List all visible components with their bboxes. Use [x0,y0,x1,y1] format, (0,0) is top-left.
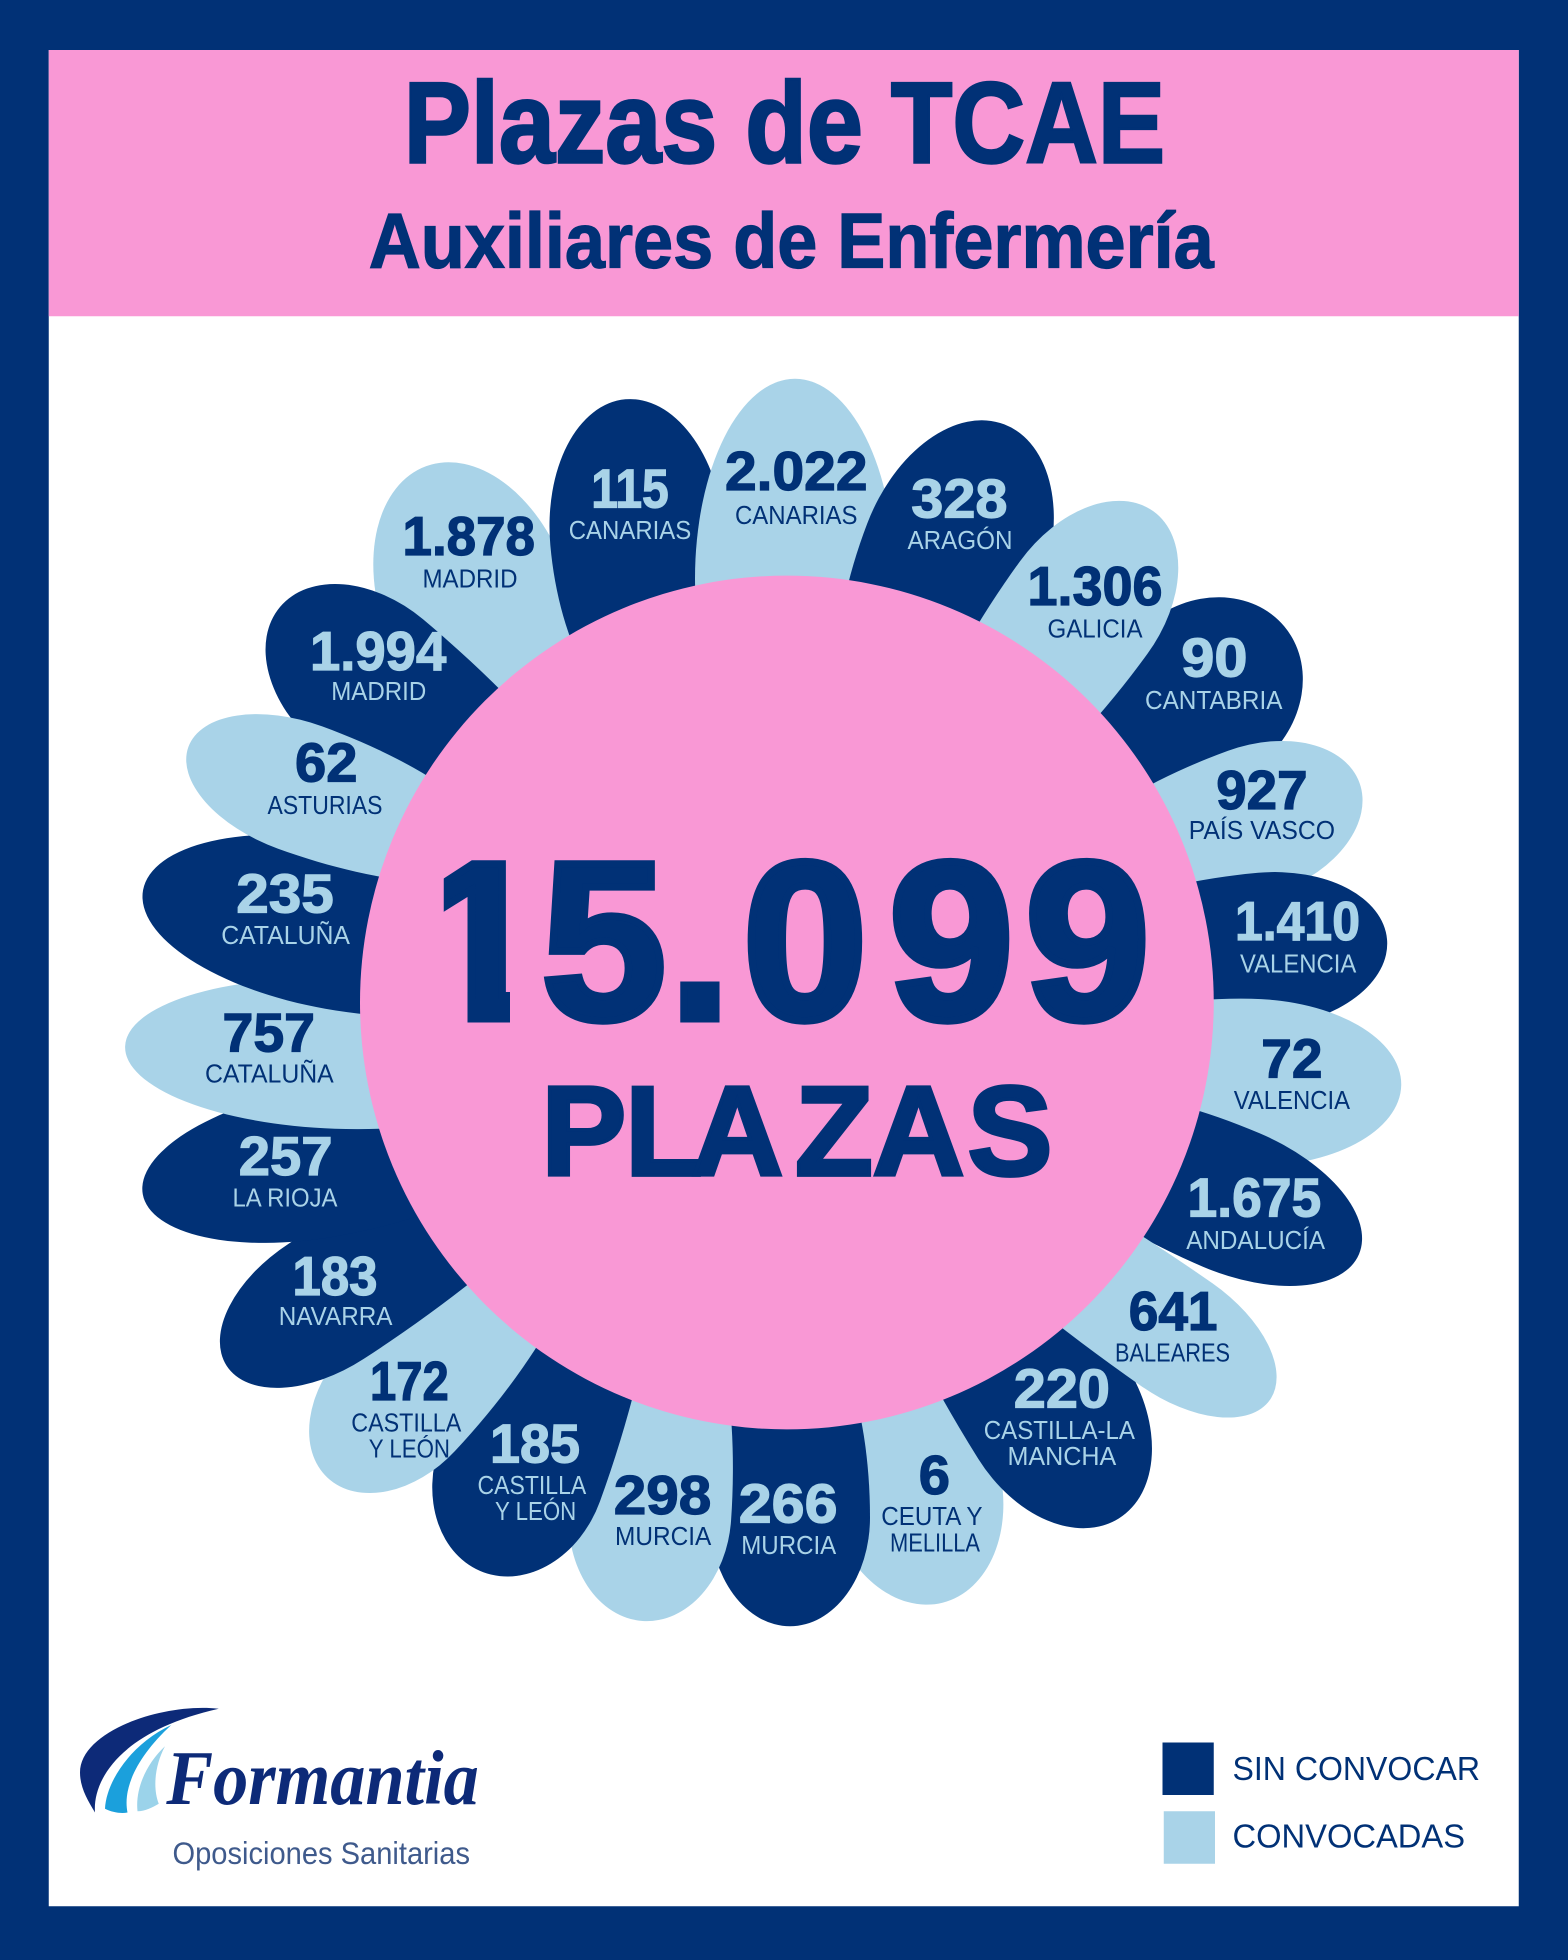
petal: 1.878 Madrid [337,434,641,844]
label: 183 Navarra [279,1245,393,1331]
label: 1.410 Valencia [1235,890,1360,978]
label: 641 Baleares: BALEARES [1115,1337,1230,1367]
legend text: sin convocar: SIN CONVOCAR [1232,1750,1480,1788]
label: 1.306 Galicia [1028,555,1162,644]
petal labels [205,440,1360,1560]
total number: 15.099 [419,815,1150,1067]
label: 641 Baleares [1115,1280,1230,1367]
petal: 1.410 Valencia [1034,862,1394,1047]
label: 1.675 Andalucia: ANDALUCÍA [1186,1225,1325,1255]
label: 298 Murcia: MURCIA [615,1521,712,1551]
petal: 72 Valencia [1024,995,1403,1169]
label: 328 Aragon: ARAGÓN [907,525,1012,555]
label: 220 Castilla-La Mancha: 220 [1014,1357,1110,1419]
label: 1.878 Madrid: MADRID [422,564,517,594]
label: 257 La Rioja [232,1125,338,1212]
flower petals [123,379,1403,1627]
label: 72 Valencia [1234,1028,1350,1115]
label: 641 Baleares: 641 [1129,1280,1217,1342]
label: 328 Aragon: 328 [911,468,1007,530]
label: 298 Murcia [614,1464,712,1551]
label: 1.878 Madrid [402,505,535,594]
label: 757 Cataluna [205,1001,334,1088]
icon: logo swooshes [80,1708,219,1813]
title: Plazas de TCAE [404,60,1165,188]
petal: 257 La Rioja [130,1050,557,1268]
label: 298 Murcia: 298 [614,1464,711,1526]
legend swatch: convocadas [1164,1811,1215,1864]
label: 185 Castilla y Leon: CASTILLA [477,1470,587,1500]
label: 6 Ceuta y Melilla [881,1444,982,1557]
center circle [360,576,1214,1429]
label: 927 Pais Vasco [1189,759,1335,845]
label: 172 Castilla y Leon [351,1350,462,1464]
label: 90 Cantabria: CANTABRIA [1145,685,1283,715]
label: 1.878 Madrid: 1.878 [402,505,535,567]
plazas label: PLAZAS [541,1061,1053,1203]
label: 257 La Rioja: 257 [239,1125,332,1187]
petal: 62 Asturias [166,686,522,921]
label: 6 Ceuta y Melilla: CEUTA Y [881,1501,982,1531]
logo: Formantia [80,1708,479,1871]
label: 2.022 Canarias [725,440,868,530]
label: 185 Castilla y Leon: Y LEÓN [495,1496,576,1526]
label: 62 Asturias [268,731,382,820]
petal: 172 Castilla y Leon [273,1166,625,1529]
label: 757 Cataluna: CATALUÑA [205,1058,334,1088]
label: 235 Cataluna [221,862,350,950]
petal: 266 Murcia [710,1305,870,1626]
label: 220 Castilla-La Mancha [984,1358,1135,1471]
label: 1.410 Valencia: 1.410 [1235,890,1360,952]
label: 1.675 Andalucia: 1.675 [1187,1166,1321,1228]
label: 183 Navarra: 183 [292,1245,377,1307]
legend text: convocadas: CONVOCADAS [1232,1817,1465,1855]
label: 6 Ceuta y Melilla: MELILLA [890,1527,980,1557]
header band [49,50,1519,316]
label: 220 Castilla-La Mancha: CASTILLA-LA [984,1415,1135,1445]
petal: 927 Pais Vasco [1017,712,1385,969]
petal: 235 Cataluna [128,807,576,1048]
label: 266 Murcia: MURCIA [741,1530,837,1560]
petal: 220 Castilla-La Mancha [780,1048,1193,1565]
petal: 90 Cantabria [974,557,1342,907]
legend swatch: sin convocar [1162,1742,1214,1795]
label: 1.994 Madrid: MADRID [331,676,426,706]
petal: 1.994 Madrid [227,544,672,955]
legend [1162,1742,1480,1864]
logo wordmark: Formantia [165,1735,479,1821]
petal: 2.022 Canarias [695,379,895,841]
label: 328 Aragon [908,468,1012,555]
label: 235 Cataluna: 235 [236,863,334,925]
label: 90 Cantabria: 90 [1181,626,1247,688]
label: 115 Canarias [569,458,691,545]
petal: 641 Baleares [834,1068,1306,1451]
label: 1.306 Galicia: GALICIA [1047,614,1143,644]
label: 220 Castilla-La Mancha: MANCHA [1007,1441,1117,1471]
label: 172 Castilla y Leon: 172 [370,1350,449,1412]
label: 183 Navarra: NAVARRA [279,1301,393,1331]
petal: 185 Castilla y Leon [404,1138,711,1601]
label: 172 Castilla y Leon: CASTILLA [351,1407,462,1437]
label: 927 Pais Vasco: 927 [1216,759,1307,821]
label: 72 Valencia: VALENCIA [1234,1085,1350,1115]
label: 62 Asturias: 62 [295,731,357,793]
label: 115 Canarias: 115 [591,458,669,520]
label: 6 Ceuta y Melilla: 6 [919,1444,950,1506]
petal: 757 Cataluna [123,971,565,1137]
label: 90 Cantabria [1145,626,1283,715]
label: 927 Pais Vasco: PAÍS VASCO [1189,815,1335,845]
label: 2.022 Canarias: CANARIAS [735,500,857,530]
label: 257 La Rioja: LA RIOJA [232,1182,338,1212]
label: 1.306 Galicia: 1.306 [1027,555,1162,617]
label: 185 Castilla y Leon: 185 [490,1412,580,1474]
petal: 1.306 Galicia [858,465,1217,876]
label: 2.022 Canarias: 2.022 [725,440,867,502]
petal: 298 Murcia [562,1260,748,1627]
subtitle: Auxiliares de Enfermería [369,199,1215,285]
petal: 183 Navarra [189,1067,636,1424]
label: 172 Castilla y Leon: Y LEÓN [369,1434,450,1464]
label: 115 Canarias: CANARIAS [569,515,691,545]
petal: 1.675 Andalucia [996,1045,1387,1321]
label: 185 Castilla y Leon [478,1412,587,1526]
petal: 328 Aragon [787,391,1091,799]
label: 757 Cataluna: 757 [222,1001,315,1063]
label: 72 Valencia: 72 [1261,1027,1322,1090]
label: 235 Cataluna: CATALUÑA [221,920,350,950]
label: 266 Murcia [739,1472,838,1560]
label: 62 Asturias: ASTURIAS [267,790,382,820]
petal: 6 Ceuta y Melilla [774,1248,1027,1624]
label: 1.410 Valencia: VALENCIA [1240,948,1357,978]
label: 266 Murcia: 266 [739,1472,837,1534]
label: 1.994 Madrid: 1.994 [310,620,447,682]
label: 1.675 Andalucia [1186,1166,1325,1255]
logo tagline: Oposiciones Sanitarias [172,1836,470,1871]
petal: 115 Canarias [538,392,741,732]
